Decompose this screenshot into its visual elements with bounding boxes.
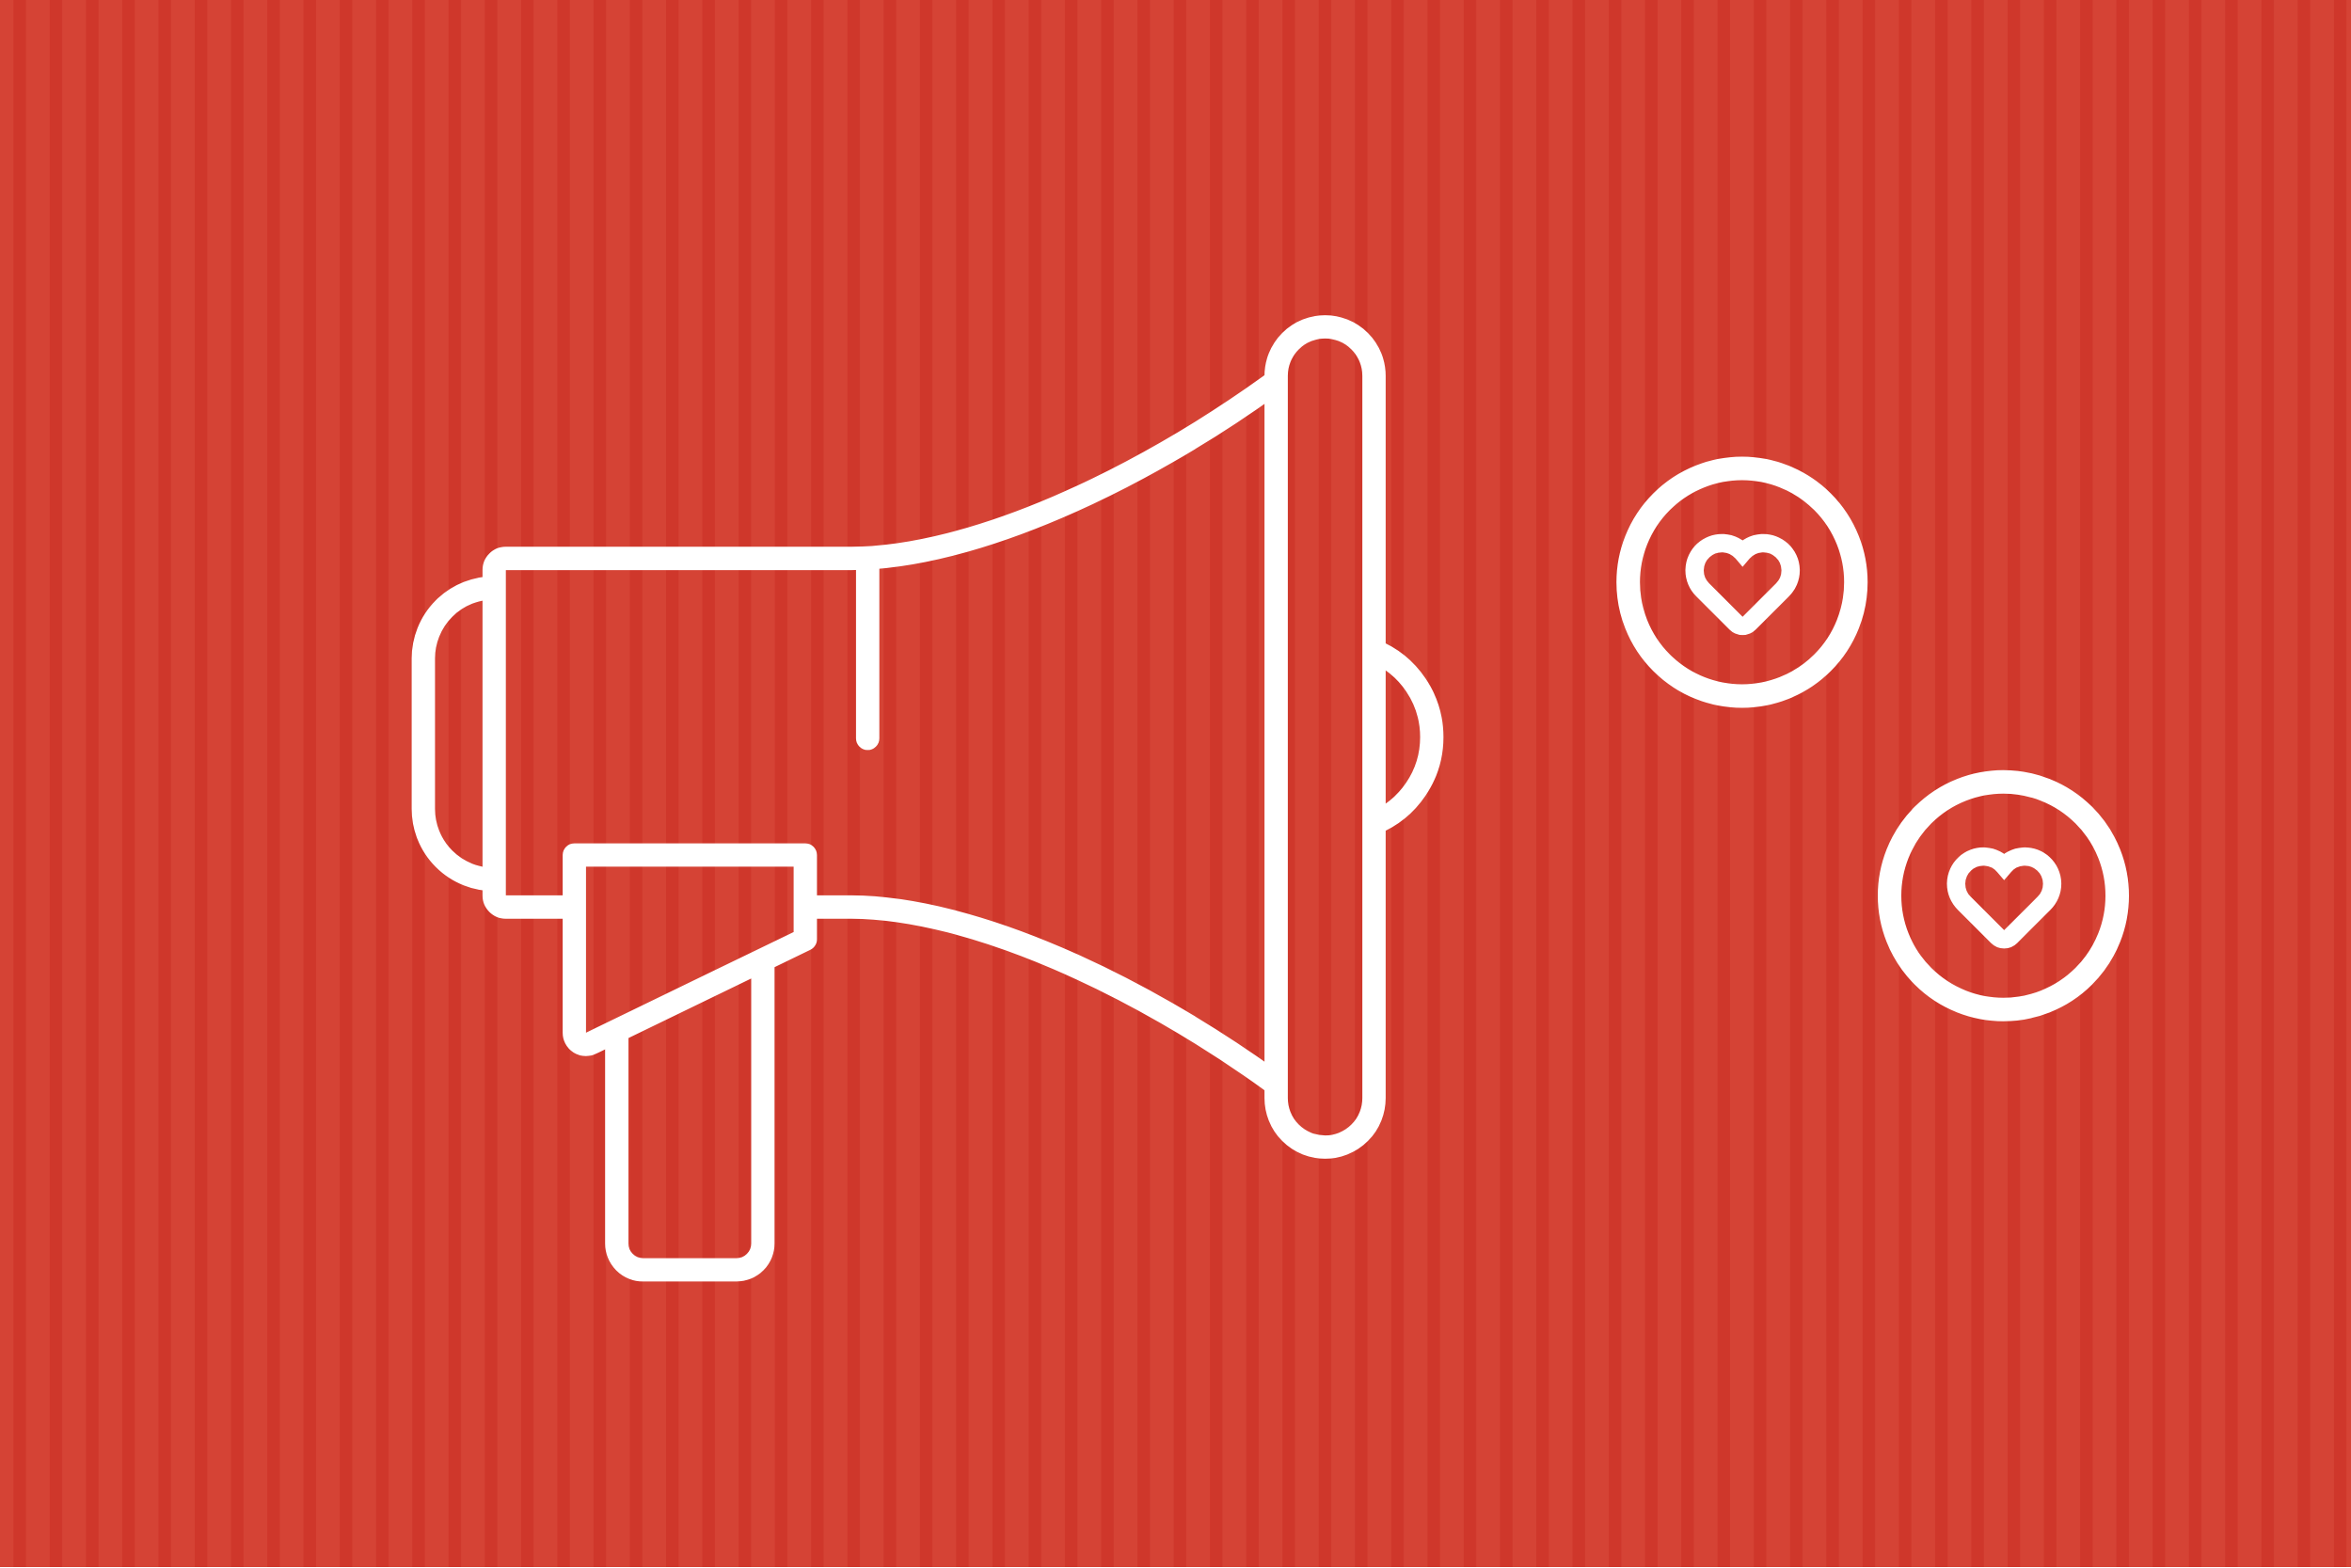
megaphone rear cap bbox=[423, 588, 494, 879]
body inner vertical stub bbox=[856, 559, 880, 738]
icon: lower heart in circle bbox=[1889, 782, 2117, 1009]
circle ring bbox=[1628, 468, 1856, 696]
megaphone lower cone curve bbox=[805, 907, 1278, 1085]
front dome bbox=[1374, 651, 1432, 823]
heart bbox=[1956, 857, 2052, 940]
trigger housing bbox=[574, 855, 805, 1044]
circle ring bbox=[1889, 782, 2117, 1009]
handle bbox=[617, 964, 763, 1270]
front bell bar bbox=[1276, 327, 1374, 1148]
icon: megaphone bbox=[423, 327, 1432, 1270]
icon: upper heart in circle bbox=[1628, 468, 1856, 696]
megaphone body and upper cone curve bbox=[494, 380, 1278, 907]
heart bbox=[1694, 543, 1790, 626]
